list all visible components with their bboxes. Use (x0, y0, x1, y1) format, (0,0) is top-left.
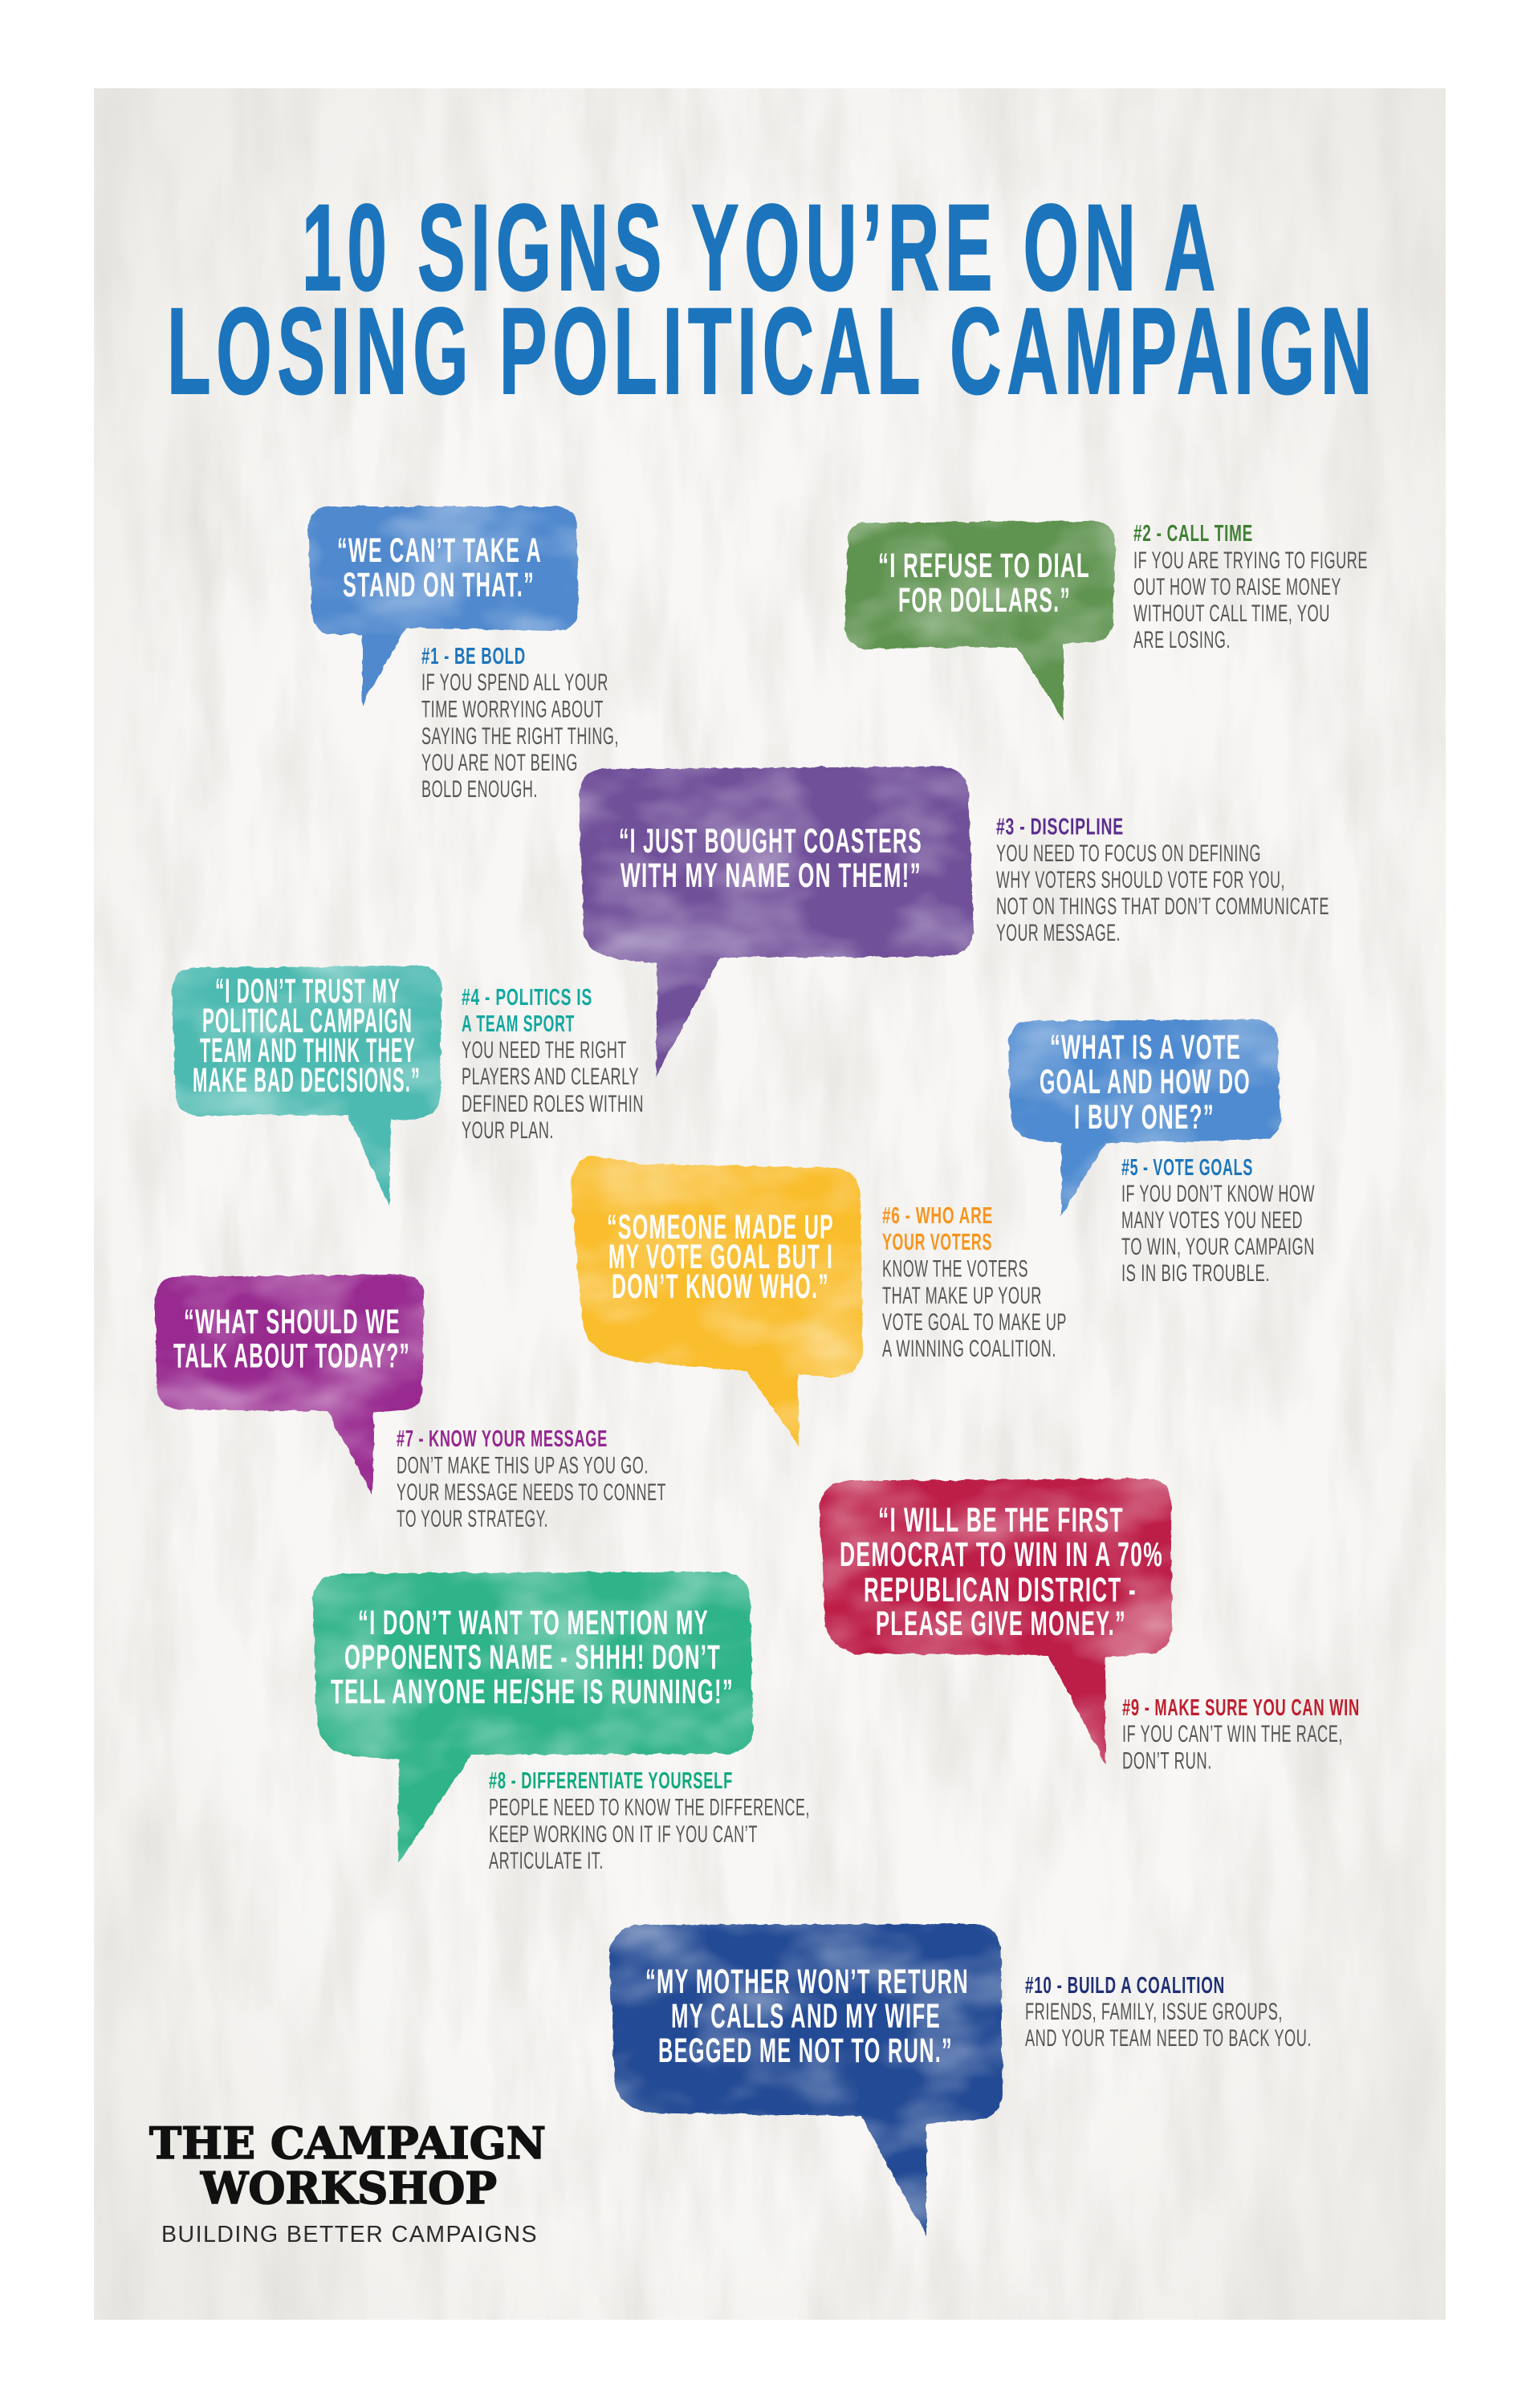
caption 7: know your message: #7 - KNOW YOUR MESSAGE (397, 1426, 608, 1452)
caption 1: be bold: BOLD ENOUGH. (421, 776, 538, 803)
caption 6: who are your voters (882, 1203, 1067, 1362)
caption 2: call time: WITHOUT CALL TIME, YOU (1133, 600, 1330, 627)
title (167, 179, 1377, 420)
caption 2: call time: OUT HOW TO RAISE MONEY (1133, 574, 1341, 600)
speech bubble 3: purple: WITH MY NAME ON THEM!” (621, 856, 922, 895)
speech bubble 2: green: “I REFUSE TO DIAL (878, 547, 1090, 585)
speech bubble 3: purple: “I JUST BOUGHT COASTERS (619, 822, 922, 860)
speech bubble 1: blue: “WE CAN’T TAKE A (337, 531, 542, 570)
caption 4: politics is a team sport: PLAYERS AND CLEARLY (462, 1064, 639, 1090)
speech bubble 5: blue: GOAL AND HOW DO (1040, 1063, 1251, 1101)
speech bubble 2: green (844, 521, 1115, 721)
caption 8: differentiate yourself (489, 1768, 810, 1874)
speech bubble 8: sea green: OPPONENTS NAME - SHHH! DON’T (344, 1638, 721, 1677)
speech bubble 4: teal (172, 966, 441, 1206)
caption 10: build a coalition (1025, 1973, 1312, 2052)
caption 5: vote goals: IS IN BIG TROUBLE. (1121, 1260, 1270, 1287)
caption 1: be bold: #1 - BE BOLD (421, 644, 526, 669)
caption 8: differentiate yourself: KEEP WORKING ON IT IF YOU CAN’T (489, 1821, 758, 1848)
speech bubble 8: sea green: TELL ANYONE HE/SHE IS RUNNING!” (331, 1673, 734, 1711)
caption 3: discipline (996, 814, 1329, 946)
caption 4: politics is a team sport: A TEAM SPORT (462, 1011, 575, 1037)
logo: The Campaign Workshop: THE CAMPAIGN (149, 2117, 546, 2169)
speech bubble 4: teal: “I DON’T TRUST MY (215, 972, 401, 1011)
caption 6: who are your voters: KNOW THE VOTERS (882, 1255, 1028, 1283)
caption 2: call time: IF YOU ARE TRYING TO FIGURE (1133, 547, 1368, 574)
speech bubble 5: blue: I BUY ONE?” (1074, 1098, 1215, 1137)
speech bubble 6: yellow: DON’T KNOW WHO.” (612, 1267, 829, 1306)
caption 2: call time: ARE LOSING. (1133, 627, 1231, 653)
caption 4: politics is a team sport: YOUR PLAN. (462, 1117, 554, 1144)
speech bubble 7: magenta: TALK ABOUT TODAY?” (173, 1337, 410, 1376)
speech bubble 4: teal: MAKE BAD DECISIONS.” (193, 1061, 421, 1100)
caption 5: vote goals: TO WIN, YOUR CAMPAIGN (1121, 1234, 1315, 1260)
caption 5: vote goals: #5 - VOTE GOALS (1121, 1155, 1253, 1181)
speech bubble 1: blue: STAND ON THAT.” (343, 566, 535, 604)
logo: The Campaign Workshop (149, 2117, 546, 2247)
caption 6: who are your voters: A WINNING COALITION. (882, 1336, 1056, 1362)
caption 6: who are your voters: #6 - WHO ARE (882, 1203, 993, 1229)
speech bubble 8: sea green: “I DON’T WANT TO MENTION MY (358, 1604, 709, 1642)
speech bubble 9: crimson: DEMOCRAT TO WIN IN A 70% (840, 1536, 1163, 1574)
speech bubble 7: magenta (155, 1275, 424, 1495)
caption 1: be bold (421, 644, 619, 803)
speech bubble 10: navy (609, 1924, 1003, 2236)
caption 4: politics is a team sport: DEFINED ROLES WITHIN (462, 1091, 644, 1117)
caption 3: discipline: YOUR MESSAGE. (996, 920, 1121, 946)
caption 3: discipline: NOT ON THINGS THAT DON’T COMMUNICATE (996, 893, 1329, 920)
speech bubble 5: blue: “WHAT IS A VOTE (1050, 1028, 1241, 1067)
speech bubble 8: sea green (313, 1572, 753, 1864)
speech bubble 5: blue (1008, 1019, 1280, 1216)
speech bubble 7: magenta: “WHAT SHOULD WE (184, 1303, 401, 1341)
logo: The Campaign Workshop: WORKSHOP (200, 2162, 497, 2214)
caption 5: vote goals: MANY VOTES YOU NEED (1121, 1207, 1303, 1234)
caption 3: discipline: #3 - DISCIPLINE (996, 814, 1124, 840)
speech bubble 10: navy: “MY MOTHER WON’T RETURN (645, 1963, 969, 2001)
caption 4: politics is a team sport: YOU NEED THE RIGHT (462, 1037, 627, 1064)
caption 4: politics is a team sport: #4 - POLITICS IS (462, 985, 592, 1011)
caption 3: discipline: WHY VOTERS SHOULD VOTE FOR YOU, (996, 867, 1285, 893)
caption 9: make sure you can win: DON’T RUN. (1122, 1748, 1212, 1774)
caption 6: who are your voters: THAT MAKE UP YOUR (882, 1283, 1042, 1309)
speech bubble 4: teal: POLITICAL CAMPAIGN (202, 1002, 413, 1040)
caption 1: be bold: TIME WORRYING ABOUT (421, 697, 604, 722)
caption 10: build a coalition: AND YOUR TEAM NEED TO BACK YOU. (1025, 2025, 1312, 2052)
speech bubble 2: green: FOR DOLLARS.” (898, 581, 1071, 620)
caption 10: build a coalition: FRIENDS, FAMILY, ISSUE GROUPS, (1025, 1999, 1283, 2025)
caption 8: differentiate yourself: ARTICULATE IT. (489, 1848, 604, 1874)
caption 6: who are your voters: YOUR VOTERS (882, 1230, 992, 1255)
caption 2: call time (1133, 521, 1368, 653)
speech bubble 9: crimson: “I WILL BE THE FIRST (878, 1501, 1124, 1540)
caption 5: vote goals (1121, 1155, 1315, 1287)
speech bubble 9: crimson (820, 1479, 1172, 1764)
caption 7: know your message: YOUR MESSAGE NEEDS TO CONNET (397, 1479, 666, 1506)
speech bubble 9: crimson: REPUBLICAN DISTRICT - (864, 1571, 1137, 1609)
caption 1: be bold: YOU ARE NOT BEING (421, 750, 578, 776)
caption 10: build a coalition: #10 - BUILD A COALITION (1025, 1973, 1225, 1999)
speech bubble 6: yellow (571, 1156, 863, 1446)
speech bubble 9: crimson: PLEASE GIVE MONEY.” (876, 1605, 1126, 1643)
speech bubble 6: yellow: “SOMEONE MADE UP (607, 1208, 834, 1247)
caption 9: make sure you can win: IF YOU CAN’T WIN THE RACE, (1122, 1721, 1343, 1747)
speech bubble 10: navy: BEGGED ME NOT TO RUN.” (658, 2032, 953, 2070)
caption 9: make sure you can win (1122, 1695, 1360, 1774)
caption 7: know your message: DON’T MAKE THIS UP AS YOU GO. (397, 1453, 649, 1479)
caption 7: know your message (397, 1426, 666, 1532)
caption 5: vote goals: IF YOU DON’T KNOW HOW (1121, 1181, 1315, 1207)
speech bubble 1: blue (308, 506, 579, 706)
caption 1: be bold: IF YOU SPEND ALL YOUR (421, 669, 608, 696)
caption 9: make sure you can win: #9 - MAKE SURE YOU CAN WIN (1122, 1695, 1360, 1721)
caption 4: politics is a team sport (462, 985, 644, 1144)
speech bubble 3: purple (579, 767, 974, 1076)
caption 1: be bold: SAYING THE RIGHT THING, (421, 723, 619, 750)
speech bubble 10: navy: MY CALLS AND MY WIFE (671, 1997, 941, 2036)
caption 6: who are your voters: VOTE GOAL TO MAKE UP (882, 1309, 1067, 1336)
caption 8: differentiate yourself: PEOPLE NEED TO KNOW THE DIFFERENCE, (489, 1795, 810, 1820)
caption 3: discipline: YOU NEED TO FOCUS ON DEFINING (996, 840, 1261, 867)
caption 2: call time: #2 - CALL TIME (1133, 521, 1253, 547)
speech bubble 6: yellow: MY VOTE GOAL BUT I (608, 1238, 833, 1276)
caption 8: differentiate yourself: #8 - DIFFERENTIATE YOURSELF (489, 1768, 733, 1794)
speech bubble 4: teal: TEAM AND THINK THEY (200, 1031, 416, 1070)
logo: The Campaign Workshop: BUILDING BETTER CAMPAIGNS (161, 2222, 538, 2247)
caption 7: know your message: TO YOUR STRATEGY. (397, 1506, 548, 1532)
